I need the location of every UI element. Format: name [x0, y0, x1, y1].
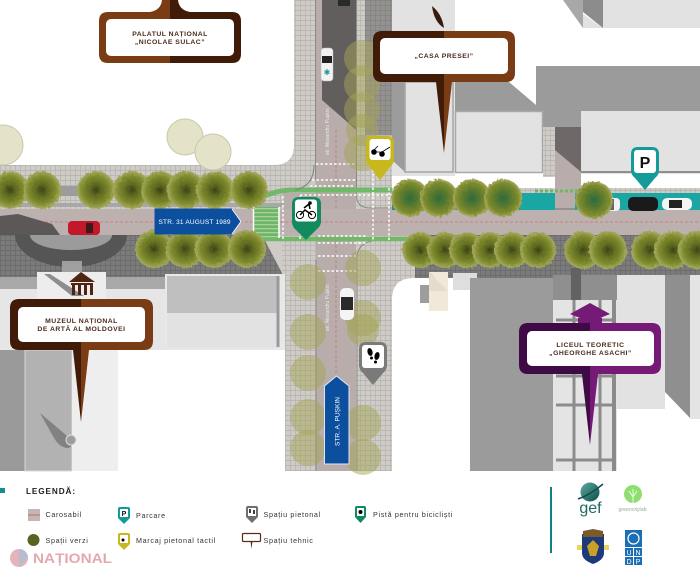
logo: UNDP: U [626, 550, 632, 557]
legend: spațiu pietonal [246, 506, 321, 523]
car: red [68, 221, 100, 235]
legend: spații verzi [28, 534, 88, 546]
legend: parcare [118, 507, 166, 524]
icon: museum [69, 272, 95, 295]
marker: tactile pedestrian marking [366, 136, 394, 180]
callout: Liceul Teoretic Gheorghe Asachi [519, 323, 661, 445]
legend: marcaj pietonal tactil [118, 533, 216, 550]
legend: spații verzi: Spații verzi [46, 536, 88, 545]
icon: graduation cap [570, 303, 610, 323]
legend heading: LEGENDĂ: [26, 486, 76, 496]
divider [550, 487, 552, 553]
buildings: lower left, national art museum [0, 261, 285, 471]
callout: Muzeul Național de Artă al Moldovei: DE ARTĂ AL MOLDOVEI [37, 324, 126, 333]
logo: UNDP: N [635, 550, 641, 557]
logo: GEF: gef [579, 500, 602, 517]
callout: Muzeul Național de Artă al Moldovei [10, 299, 153, 422]
marker: parking [631, 147, 659, 190]
logo: UNDP [625, 530, 642, 566]
legend: spațiu pietonal: Spațiu pietonal [264, 510, 321, 519]
transparent trees: along Pușkin street [290, 40, 381, 475]
marker: parking: P [640, 155, 651, 172]
callout: Casa Presei [373, 31, 515, 153]
car: dark, top road [338, 0, 350, 6]
legend: pistă pentru bicicliști: Pistă pentru bicicliști [373, 510, 453, 519]
logo: GEF [578, 482, 603, 517]
legend: carosabil [28, 509, 82, 521]
horizontal road [0, 193, 700, 236]
car: ambulance: ✱ [324, 68, 331, 77]
street sign: Str. 31 August 1989: STR. 31 AUGUST 1989 [158, 219, 231, 226]
legend: spațiu tehnic [242, 534, 314, 549]
parking strip [350, 190, 700, 210]
legend: pistă pentru bicicliști [355, 506, 453, 523]
logo: greencitylab: greencitylab [619, 507, 647, 513]
logo: UNDP: D [626, 559, 632, 566]
buildings: top right [392, 0, 700, 177]
road labels: str. Alexandru Pușkin [325, 284, 331, 331]
vertical road [316, 0, 392, 471]
car: white, parking [662, 198, 692, 210]
callout: Palatul Național Nicolae Sulac: „NICOLAE SULAC” [135, 39, 205, 46]
legend: carosabil: Carosabil [46, 510, 82, 519]
pale trees: courtyard [0, 119, 231, 170]
car: ambulance [321, 48, 333, 81]
car: white, lower road [340, 288, 354, 320]
bike lane and crossings [252, 164, 418, 271]
legend accent [0, 488, 5, 493]
logo: greencitylab [619, 485, 647, 513]
paved strip: lower right [415, 235, 700, 278]
marker: bicycle lane [292, 197, 321, 240]
paved plaza: lower left [0, 214, 282, 278]
marker: pedestrian space [359, 342, 387, 385]
street sign: Str. A. Pușkin [324, 376, 349, 464]
legend: spațiu tehnic: Spațiu tehnic [264, 536, 314, 545]
street sign: Str. A. Pușkin: STR. A. PUȘKIN [334, 397, 342, 446]
callout: Muzeul Național de Artă al Moldovei: MUZEUL NAȚIONAL [45, 318, 118, 325]
road labels [325, 108, 331, 331]
legend: parcare: Parcare [136, 511, 166, 520]
trees: over parking strip [391, 179, 613, 219]
watermark: Național logo [10, 549, 112, 567]
callout: Liceul Teoretic Gheorghe Asachi: LICEUL TEORETIC [556, 342, 625, 349]
callout: Liceul Teoretic Gheorghe Asachi: „GHEORGHE ASACHI” [549, 350, 632, 357]
callout: Palatul Național Nicolae Sulac: PALATUL NAȚIONAL [132, 31, 208, 38]
logo: UNDP: P [636, 559, 641, 566]
icon: feather [432, 6, 444, 28]
logo: Chișinău coat of arms [577, 529, 609, 564]
street sign: Str. 31 August 1989 [155, 209, 241, 234]
buildings: lower right, high school [420, 268, 700, 471]
legend: marcaj pietonal tactil: Marcaj pietonal tactil [136, 536, 216, 545]
trees: avenue rows [0, 171, 700, 269]
cars [68, 0, 692, 320]
legend: parcare: P [122, 511, 127, 518]
road labels: str. Alexandru Pușkin [325, 108, 331, 155]
callout: Palatul Național Nicolae Sulac [99, 0, 241, 63]
callout: Casa Presei: „CASA PRESEI” [414, 53, 474, 60]
watermark: Național logo: NAȚIONAL [33, 550, 112, 566]
car: olive, parking [590, 198, 620, 211]
car: black, parking [628, 197, 658, 211]
